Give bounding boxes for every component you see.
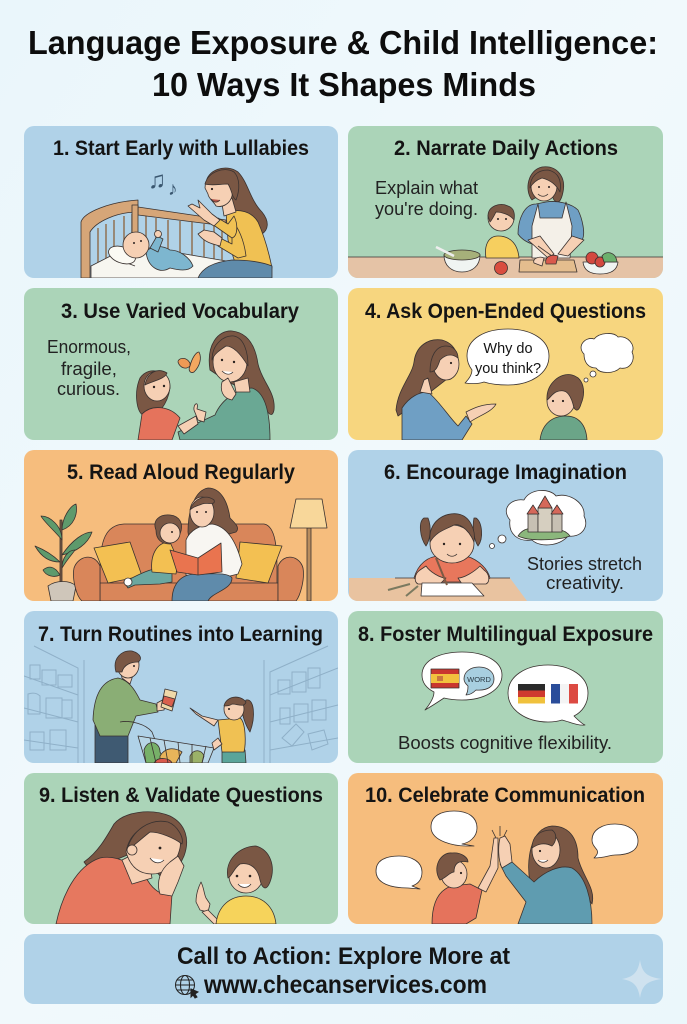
left shelves [24,646,84,763]
title [28,24,658,103]
panel: 6. Encourage Imagination [348,450,663,601]
heading 9: 9. Listen & Validate Questions [39,784,323,807]
shopping cart [120,721,214,763]
panel: 7. Turn Routines into Learning [24,611,338,763]
plant [35,504,92,601]
book [170,543,222,575]
caption 6 [527,554,642,593]
empty bubbles [376,811,638,889]
icon: globe with cursor [176,976,198,998]
speech bubble: Why do [483,341,533,357]
panel: 3. Use Varied Vocabulary [24,288,338,440]
caption 3: fragile, [61,359,117,379]
panel: 10. Celebrate Communication [348,773,663,924]
panel: 9. Listen & Validate Questions [24,773,338,924]
call to action heading: Call to Action: Explore More at [177,943,510,970]
caption 2 [375,178,478,219]
bubble: Spanish flag [422,652,502,710]
icon: music notes: ♫ [148,167,166,194]
heading 4: 4. Ask Open-Ended Questions [365,300,646,323]
caption 3: curious. [57,379,120,399]
speech bubbles with flags [422,652,588,725]
title: Language Exposure & Child Intelligence: [28,24,658,61]
right shelves [264,646,338,763]
apple [494,262,508,274]
panel: 8. Foster Multilingual Exposure [348,611,663,763]
bubble: German and French flags [508,665,588,725]
illustration: parent and child shopping [24,646,338,763]
panel: 5. Read Aloud Regularly [24,450,338,601]
jar [161,689,177,711]
illustration: high five with speech bubbles [376,811,638,924]
title: 10 Ways It Shapes Minds [152,66,536,103]
child [124,515,182,588]
bowl [444,255,480,272]
illustration: reading on sofa [35,488,327,601]
heading 10: 10. Celebrate Communication [365,784,645,807]
mother [499,826,593,924]
call to action banner [24,934,663,1004]
speech bubble [465,329,549,385]
illustration: parent listening to child [56,812,276,924]
illustration: parent singing to baby in crib [81,167,272,278]
illustration: cooking with child [348,167,663,278]
girl [190,697,253,763]
heading 8: 8. Foster Multilingual Exposure [358,623,653,646]
heading 7: 7. Turn Routines into Learning [38,623,323,646]
caption 2: you're doing. [375,199,478,219]
illustration: child imagining castle [349,490,586,601]
panel: 4. Ask Open-Ended Questions [348,288,663,440]
icon: music notes [151,174,176,195]
icon: sparkle [622,960,662,998]
heading 3: 3. Use Varied Vocabulary [61,300,299,323]
bubble: Spanish flag: WORD [467,675,491,684]
illustration: parent asking child [396,329,633,440]
parent [172,488,242,601]
heading 2: 2. Narrate Daily Actions [394,137,618,160]
heading 1: 1. Start Early with Lullabies [53,137,309,160]
heading 6: 6. Encourage Imagination [384,461,627,484]
sofa [73,524,303,601]
panel: 2. Narrate Daily Actions [348,126,663,278]
cutting board [519,260,577,272]
caption 2: Explain what [375,178,478,198]
icon: butterfly [178,352,200,373]
caption 8: Boosts cognitive flexibility. [398,733,612,753]
lamp [290,499,327,601]
website link: www.checanservices.com [203,971,487,999]
boy [432,838,498,924]
icon: music notes: ♪ [168,179,178,200]
illustration: parent and child with butterfly [137,331,274,440]
thought cloud with castle [506,490,586,545]
caption 6: creativity. [546,573,624,593]
heading 5: 5. Read Aloud Regularly [67,461,295,484]
panel: 1. Start Early with Lullabies [24,126,338,278]
speech bubble: you think? [475,361,541,377]
thought cloud [581,333,633,382]
caption 3 [47,337,131,399]
father [93,651,166,763]
right bowl [583,262,618,274]
caption 3: Enormous, [47,337,131,357]
caption 6: Stories stretch [527,554,642,574]
